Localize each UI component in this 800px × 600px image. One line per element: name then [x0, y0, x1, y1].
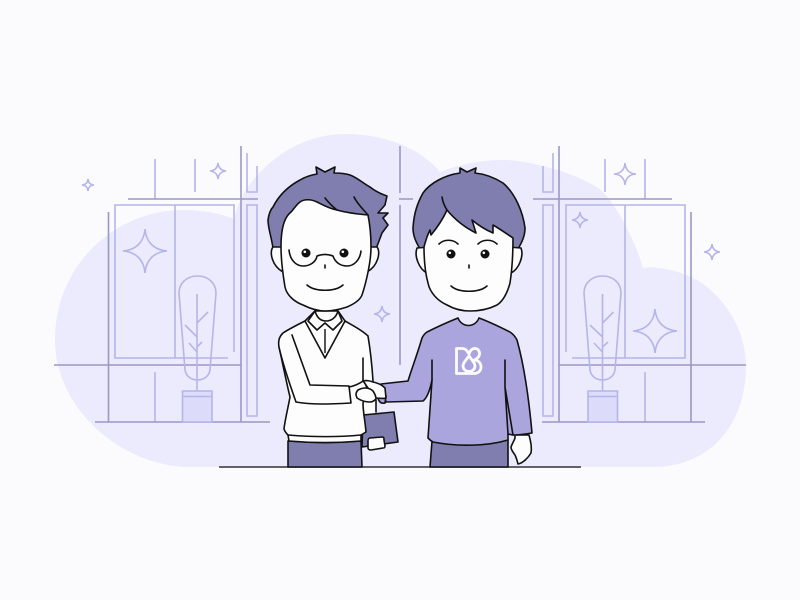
- handshake: [349, 381, 386, 402]
- hair fold: [442, 197, 447, 210]
- nose and smile: [451, 265, 487, 291]
- left window frame: [115, 205, 234, 358]
- eyes: [446, 250, 490, 258]
- glasses: [289, 250, 361, 266]
- sleeve seams: [432, 360, 513, 435]
- bag tag: [368, 437, 385, 450]
- hair: [413, 168, 525, 249]
- nose and smile: [307, 265, 343, 290]
- right upper sparkle: [614, 163, 636, 185]
- bag strap: [360, 398, 376, 416]
- person: left man with glasses: [268, 167, 398, 467]
- left man's hand: [349, 381, 376, 402]
- left small sparkle: [82, 179, 94, 191]
- sweater body: [279, 321, 373, 442]
- right window frame: [566, 205, 685, 358]
- left plant pot: [182, 391, 212, 422]
- right plant pot: [588, 391, 618, 422]
- face: [281, 200, 371, 311]
- sweater logo: [456, 348, 481, 374]
- eyes: [302, 248, 348, 258]
- shirt collar and v-neck: [305, 311, 345, 358]
- eyebrows: [439, 240, 497, 244]
- left building scene: [54, 146, 270, 422]
- sleeve: [279, 335, 351, 404]
- hair: [268, 167, 388, 249]
- trousers: [430, 440, 508, 467]
- ears: [271, 247, 379, 272]
- cuff lower: [378, 396, 386, 403]
- right plant: [584, 276, 621, 422]
- right window sparkle: [572, 212, 588, 228]
- hair fold: [325, 197, 368, 215]
- left upper sparkle: [210, 163, 226, 179]
- ground line: [219, 466, 581, 468]
- background cloud blob: [55, 134, 746, 467]
- sweater hem: [288, 435, 361, 436]
- right building scene: [533, 146, 746, 422]
- hand at side: [511, 435, 531, 464]
- right large sparkle: [633, 309, 677, 353]
- centre wall lines: [399, 146, 413, 365]
- person: right man in purple sweater: [378, 168, 532, 467]
- ears: [416, 247, 522, 273]
- right outer sparkle: [704, 244, 720, 260]
- sweater: [381, 318, 532, 445]
- left large sparkle: [123, 229, 167, 273]
- trousers: [288, 441, 362, 467]
- face: [424, 210, 513, 311]
- briefcase: [362, 412, 398, 447]
- right man's hand: [363, 381, 386, 398]
- centre sparkle: [374, 306, 390, 322]
- left plant: [179, 276, 216, 422]
